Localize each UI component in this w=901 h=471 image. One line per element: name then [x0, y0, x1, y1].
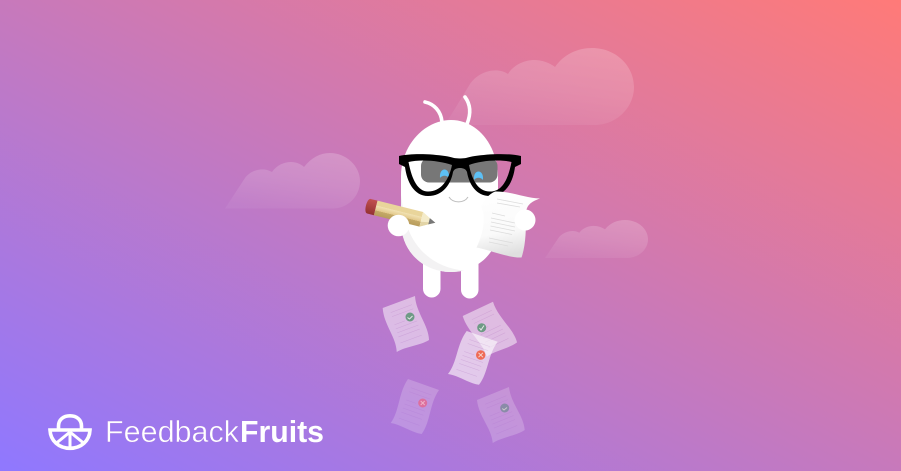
badge: faded cross: [418, 398, 427, 408]
badge: check: [406, 312, 414, 322]
antennae: [425, 97, 470, 124]
body: [401, 120, 498, 272]
left hand: [388, 215, 409, 236]
body shadow: [401, 195, 464, 272]
right hand: [514, 210, 536, 230]
legs: [423, 245, 478, 298]
paper: faded with cross: [389, 379, 440, 435]
paper: check top right: [462, 301, 518, 358]
badge: check: [477, 323, 486, 332]
paper: faded with check: [476, 387, 526, 444]
logo icon: [50, 416, 90, 448]
paper: grey check top left: [382, 296, 430, 353]
smile: [449, 197, 468, 202]
eyes: [440, 170, 483, 180]
logo wordmark: Feedback: [105, 414, 239, 449]
face visor: [421, 158, 498, 182]
pencil: [364, 198, 437, 230]
glasses: [399, 154, 521, 196]
held paper: [476, 191, 540, 258]
character: [364, 97, 540, 298]
paper: center with red cross: [447, 331, 499, 386]
cloud: left: [225, 153, 360, 208]
logo: [50, 414, 324, 449]
cloud: small right: [545, 220, 648, 258]
badge: cross: [476, 350, 485, 360]
badge: faded check: [500, 404, 509, 412]
cloud: large top right: [445, 48, 634, 125]
logo wordmark: Fruits: [240, 414, 324, 449]
